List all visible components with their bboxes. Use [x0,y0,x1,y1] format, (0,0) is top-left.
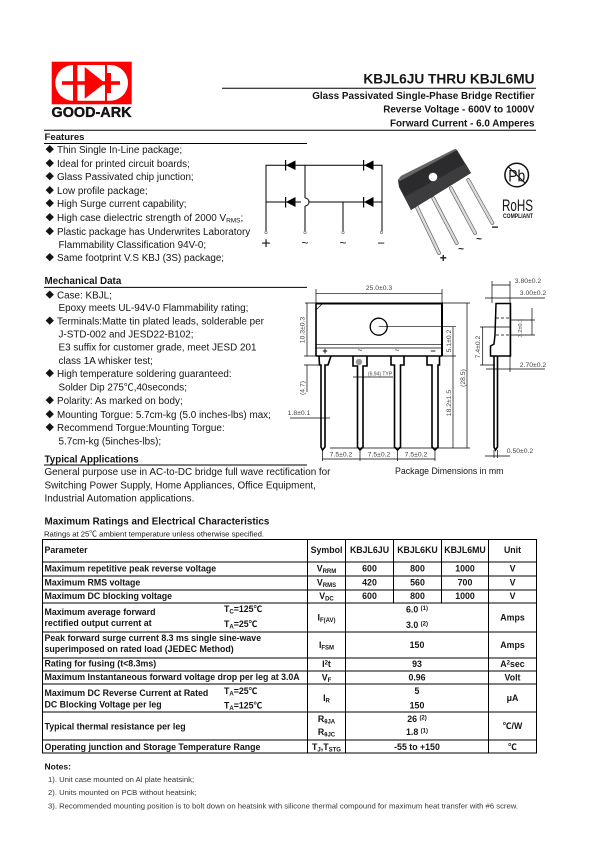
parameter column: =125℃ [234,700,263,710]
values columns: 600 [362,591,377,601]
parameter column: Maximum average forward [44,607,155,617]
parameter column: Rating for fusing (t<8.3ms) [44,658,156,668]
unit column [500,564,525,752]
mechanical data list: ◆ [46,396,54,406]
mechanical data list: ◆ [46,316,54,326]
values columns: 600 [362,564,377,574]
table header row: KBJL6MU [444,545,486,555]
package illustration: − [491,220,499,234]
mechanical data list: Polarity: As marked on body; [57,396,183,407]
unit column: ℃/W [503,721,523,731]
heading: maximum ratings [44,516,270,538]
parameter column: Maximum DC blocking voltage [44,591,172,601]
parameter column: =25℃ [234,619,258,629]
mechanical data list: ◆ [46,290,54,300]
title block [222,72,536,130]
features list: ◆ [46,172,54,182]
dimensions [316,289,442,303]
heading: maximum ratings: Ratings at 25℃ ambient temperature unless otherwise specified. [44,530,264,538]
heading: maximum ratings: Maximum Ratings and Electrical Characteristics [44,516,270,528]
mechanical data list: Terminals:Matte tin plated leads, solderable per [57,316,265,328]
circuit schematic: bridge rectifier: ~ [339,236,347,250]
mechanical data list: High temperature soldering guaranteed: [57,369,232,380]
dimension drawing: side view: 7.4±0.2 [475,335,482,358]
symbol column: I [323,693,326,703]
symbol column: R [318,727,324,737]
features list: ◆ [46,252,54,262]
parameter column: DC Blocking Voltage per leg [44,700,162,710]
symbol column: F(AV) [320,618,336,624]
features list: ◆ [46,198,54,208]
mechanical data list: Mounting Torgue: 5.7cm-kg (5.0 inches-lbs) max; [57,410,271,421]
features list: ◆ [46,144,54,154]
unit column: V [510,591,516,601]
symbol column: ,T [321,742,329,752]
values columns: 1000 [455,591,475,601]
unit column: V [510,564,516,574]
dimension drawing: front view [288,285,470,461]
parameter column: =125℃ [234,604,263,614]
parameter column: Maximum DC Reverse Current at Rated [44,688,208,698]
notes [44,762,518,810]
package illustration: + [440,251,447,265]
unit column: A [500,659,507,669]
symbol column: I [319,640,321,650]
symbol column: J [317,748,321,754]
circuit schematic: bridge rectifier: ~ [301,236,309,250]
mechanical data list [46,290,271,448]
RoHS mark: COMPLIANT [503,214,533,220]
features list: Same footprint V.S KBJ (3S) package; [57,253,224,264]
heading: Typical Applications: Typical Applications [44,454,139,466]
parameter column: A [229,624,234,630]
unit column: sec [510,659,525,669]
values columns: 700 [458,578,472,588]
RoHS mark: RoHS [502,196,533,215]
features list: Low profile package; [57,186,148,197]
parameter column: Peak forward surge current 8.3 ms single sine-wave [44,633,261,643]
symbol column: RMS [323,583,336,589]
table header row: Unit [504,545,521,555]
symbol column: V [317,578,323,588]
features list: ◆ [46,226,54,236]
symbol column: DC [325,596,334,602]
values columns: 800 [410,591,425,601]
symbol column: 2 [325,660,329,666]
parameter column: T [224,604,229,614]
parameter column: A [229,706,234,712]
values columns: 150 [410,700,424,710]
notes: 1). Unit case mounted on Al plate heatsink; [48,775,194,784]
RoHS mark [502,196,533,220]
parameter column [44,564,300,752]
symbol column [312,564,341,754]
dimension drawing: front view: + [322,346,328,356]
parameter column: Maximum Instantaneous forward voltage drop per leg at 3.0A [44,672,300,682]
symbol column: θJA [324,720,336,726]
features list: Thin Single In-Line package; [57,145,182,156]
mechanical data list: ◆ [46,368,54,378]
mechanical data list: Recommend Torgue:Mounting Torgue: [57,423,225,434]
circuit schematic: bridge rectifier: − [377,236,385,250]
features list: Glass Passivated chip junction; [57,172,194,183]
icon: lead free [505,163,528,187]
typical applications text [44,467,331,504]
parameter column: T [224,700,229,710]
symbol column: FSM [321,646,334,652]
icon: lead free: Pb [508,166,525,186]
values columns: 150 [410,640,424,650]
dimension drawing: front view: (4.7) [300,381,306,395]
unit column: Volt [505,672,521,682]
title block: Forward Current - 6.0 Amperes [390,119,535,130]
symbol column: t [328,659,331,669]
dimension drawing: front view: 25.0±0.3 [366,285,392,292]
symbol column: V [319,591,325,601]
unit column: V [510,578,516,588]
dimension drawing: front view: (28.5) [460,369,467,387]
unit column: 2 [507,660,511,666]
logo: GOOD-ARK [52,62,132,121]
heading: Mechanical Data: Mechanical Data [44,276,122,287]
mechanical data list: ◆ [46,410,54,420]
caption: package dimensions: Package Dimensions in mm [395,466,503,476]
parameter column: A [229,692,234,698]
values columns: 1.8 [406,727,418,737]
values columns: 3.0 [406,620,418,630]
typical applications text: Switching Power Supply, Home Appliances, Office Equipment, [44,480,316,492]
values columns: 560 [410,578,425,588]
table header row: Parameter [44,545,88,555]
values columns: 420 [362,578,377,588]
ratings table [42,540,536,754]
features list: High Surge current capability; [57,199,187,210]
values columns: -55 to +150 [394,742,440,752]
package illustration: ~ [476,234,482,245]
dimension drawing: front view: − [430,346,436,356]
symbol column: R [326,698,331,704]
dimension drawing: side view [475,278,546,458]
package illustration [398,149,499,265]
dimension drawing: front view: 18.2±1.5 [446,390,453,416]
values columns: 26 [407,714,417,724]
symbol column: V [317,564,323,574]
mechanical data list: class 1A whisker test; [58,356,153,367]
table grid [42,540,536,753]
dimension drawing: front view: 10.3±0.3 [300,317,306,343]
table header row: Symbol [311,545,342,555]
features list [46,144,250,264]
values columns: 93 [412,659,422,669]
mechanical data list: E3 suffix for customer grade, meet JESD 201 [58,342,257,354]
values columns: 0.96 [408,672,426,682]
symbol column: R [318,714,324,724]
dimension drawing: front view: 7.5±0.2 [368,452,391,458]
features list: ◆ [46,212,54,222]
features list: ; [241,213,243,224]
notes: 3). Recommended mounting position is to bolt down on heatsink with silicone thermal compound for maximum heat transfer with #6 screw. [48,802,518,810]
table header row [44,545,521,555]
circuit schematic: bridge rectifier: + [261,236,271,252]
values columns: (2) [421,622,428,628]
mechanical data list: Epoxy meets UL-94V-0 Flammability rating; [58,303,248,314]
features list: Ideal for printed circuit boards; [57,159,190,170]
dimension drawing: front view: ~ [358,346,363,355]
symbol column: I [317,612,320,622]
symbol column: RRM [323,569,336,575]
values columns: 800 [410,564,425,574]
symbol column: T [312,742,317,752]
values columns: (2) [419,716,427,722]
parameter column: Maximum repetitive peak reverse voltage [44,564,216,574]
features list: ◆ [46,158,54,168]
values columns: 5 [415,686,420,696]
parameter column: Operating junction and Storage Temperature Range [44,742,260,752]
features list: High case dielectric strength of 2000 V [57,213,226,224]
dimension drawing: front view: 7.5±0.2 [405,452,428,458]
typical applications text: General purpose use in AC-to-DC bridge full wave rectification for [44,467,331,478]
notes: 2). Units mounted on PCB without heatsink; [48,788,197,797]
parameter column: Typical thermal resistance per leg [44,722,186,732]
mechanical data list: ◆ [46,422,54,432]
unit column: Amps [500,640,525,650]
dimension drawing: side view: 3.2±0.1 [518,319,524,337]
parameter column: C [229,610,234,616]
pins [319,356,440,450]
title block: Glass Passivated Single-Phase Bridge Rectifier [312,91,535,102]
table header row: KBJL6KU [397,545,438,555]
symbol column: F [328,678,332,684]
typical applications text: Industrial Automation applications. [44,494,194,504]
circuit schematic: bridge rectifier [261,160,385,252]
values columns: (1) [421,606,428,612]
dimension drawing: front view: ~ [395,346,400,355]
unit column: μA [507,693,519,703]
dimension drawing: front view: 1.8±0.1 [288,410,311,417]
unit column: Amps [500,612,525,622]
dimension drawing: front view: 5.1±0.2 [446,329,453,352]
features list: ◆ [46,186,54,196]
features list: Plastic package has Underwrites Laboratory [57,227,250,238]
parameter column: rectified output current at [44,618,152,628]
package illustration: ~ [458,244,464,255]
symbol column: I [322,659,325,669]
symbol column: STG [329,748,341,754]
parameter column: superimposed on rated load (JEDEC Method) [44,644,234,654]
title block: Reverse Voltage - 600V to 1000V [383,105,535,116]
parameter column: Maximum RMS voltage [44,578,140,588]
dimension drawing: front view: (6.94) TYP [368,372,393,378]
dimension drawing: front view: 7.5±0.2 [330,452,353,458]
mechanical data list: 5.7cm-kg (5inches-lbs); [58,436,161,448]
dimension drawing: side view: 3.80±0.2 [515,278,541,285]
values columns: (1) [421,728,428,734]
values columns: 1000 [455,564,475,574]
dimension drawing: side view: 2.70±0.2 [520,362,546,369]
values columns [362,564,475,752]
symbol column: θJC [324,732,336,738]
logo: GOOD-ARK: GOOD-ARK [52,105,132,121]
features list: RMS [226,218,241,224]
mechanical data list: Case: KBJL; [57,290,112,302]
mechanical data list: Solder Dip 275℃,40seconds; [58,382,187,394]
notes: Notes: [44,762,71,772]
parameter column: T [224,619,229,629]
parameter column: =25℃ [234,686,258,696]
table header row: KBJL6JU [350,545,389,555]
unit column: ℃ [508,742,517,752]
values columns: 6.0 [406,604,418,614]
title block: KBJL6JU THRU KBJL6MU [363,72,535,86]
parameter column: T [224,686,229,696]
dimension drawing: side view: 3.00±0.2 [520,290,546,297]
dimension drawing: side view: 0.50±0.2 [507,448,533,455]
heading: Features: Features [44,132,84,143]
mechanical data list: J-STD-002 and JESD22-B102; [58,330,194,340]
features list: Flammability Classification 94V-0; [58,240,206,251]
symbol column: V [322,672,328,682]
